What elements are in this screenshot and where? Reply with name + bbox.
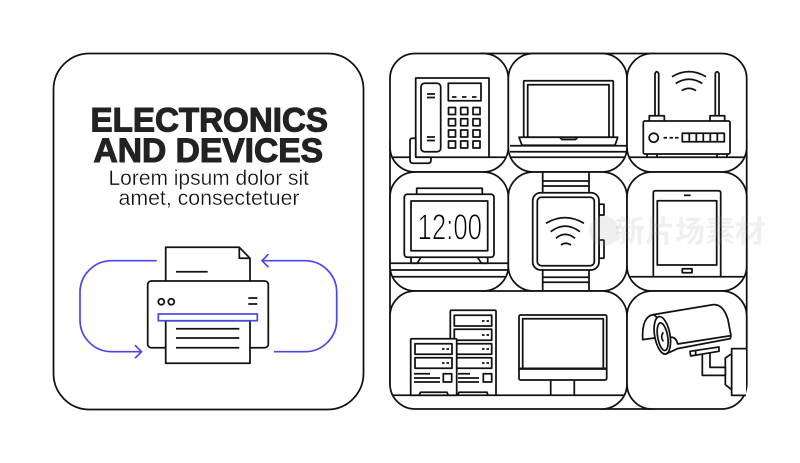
tile: desk phone xyxy=(390,54,508,172)
tile: laptop xyxy=(508,54,627,172)
tile: digital clock xyxy=(390,172,508,291)
icon: camera wall mount xyxy=(732,349,746,395)
icon: camera arm xyxy=(702,353,725,375)
icon: camera hood xyxy=(643,315,661,340)
subtitle: Lorem ipsum dolor sit xyxy=(108,167,309,190)
tile: tablet xyxy=(627,172,747,291)
panel: icon grid frame xyxy=(390,54,747,409)
tile: servers and monitor xyxy=(390,291,627,409)
arrow: right loop xyxy=(262,254,337,352)
icon: watch wifi waves xyxy=(546,218,584,245)
icon: back server tower xyxy=(450,310,496,395)
title: AND DEVICES xyxy=(94,132,323,170)
icon: desktop monitor xyxy=(519,315,607,395)
panel: title card xyxy=(54,54,364,410)
tile: security camera xyxy=(627,291,747,409)
clock digits: 12:00 xyxy=(418,206,482,247)
icon: camera body xyxy=(653,305,731,354)
icon: camera bracket xyxy=(690,347,719,356)
icon: camera lens xyxy=(651,315,673,355)
subtitle: amet, consectetuer xyxy=(118,187,300,210)
title: ELECTRONICS xyxy=(90,102,328,140)
title xyxy=(90,102,328,170)
watermark: 新片场素材 xyxy=(615,207,765,251)
icon: router wifi waves xyxy=(672,72,706,91)
subtitle xyxy=(108,167,309,210)
tile: smartwatch xyxy=(508,172,627,291)
tile: wifi router xyxy=(627,54,747,172)
icon: printer xyxy=(148,247,268,363)
arrow: left loop xyxy=(80,261,157,358)
icon: front server tower xyxy=(411,339,457,395)
